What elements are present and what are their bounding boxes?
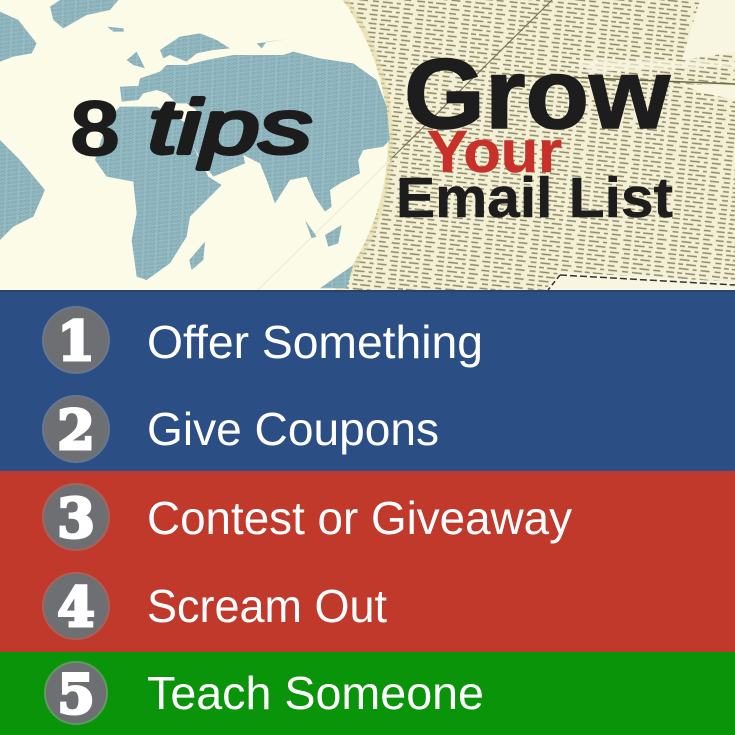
- 8 tips heading: tips: [148, 85, 312, 170]
- 8 tips heading: 8: [70, 84, 120, 172]
- map: Indonesia: [325, 225, 342, 247]
- tip 2: Give Coupons: [147, 403, 439, 455]
- tip 1: Offer Something: [147, 316, 483, 368]
- 8 tips heading: [70, 84, 312, 172]
- panel: green tips band: [0, 652, 735, 735]
- tip 3: 3: [57, 486, 95, 550]
- globe map: [0, 0, 393, 383]
- map: North America: [0, 12, 37, 62]
- tip 5: [45, 662, 484, 726]
- tip 4: Scream Out: [147, 580, 387, 632]
- tip 3: Contest or Giveaway: [147, 492, 572, 544]
- map: British Isles: [127, 52, 145, 68]
- map: Scandinavia: [160, 33, 230, 62]
- title: Grow Your Email List: Email List: [396, 166, 673, 230]
- map: Eurasia: [120, 52, 390, 212]
- tip 5: 5: [57, 662, 95, 726]
- tip 5: Teach Someone: [147, 667, 484, 719]
- tip 1: [43, 307, 483, 373]
- tip 4: 4: [57, 575, 95, 639]
- title: Grow Your Email List: [396, 38, 673, 230]
- panel: blue tips band: [0, 290, 735, 471]
- map: Madagascar: [189, 242, 205, 270]
- title: Grow Your Email List: Grow: [404, 38, 671, 149]
- tip 3: [43, 484, 572, 550]
- tip 2: [43, 396, 439, 462]
- newspaper background: [0, 0, 735, 290]
- map: Iceland: [107, 27, 124, 32]
- map: Greenland: [50, 0, 118, 28]
- map: South America: [0, 140, 45, 240]
- panel: red tips band: [0, 471, 735, 652]
- tip 4: [43, 573, 387, 639]
- tip 1: 1: [57, 309, 95, 373]
- map: Africa: [95, 107, 222, 280]
- tip 2: 2: [57, 398, 95, 462]
- title: Grow Your Email List: Your: [427, 119, 562, 185]
